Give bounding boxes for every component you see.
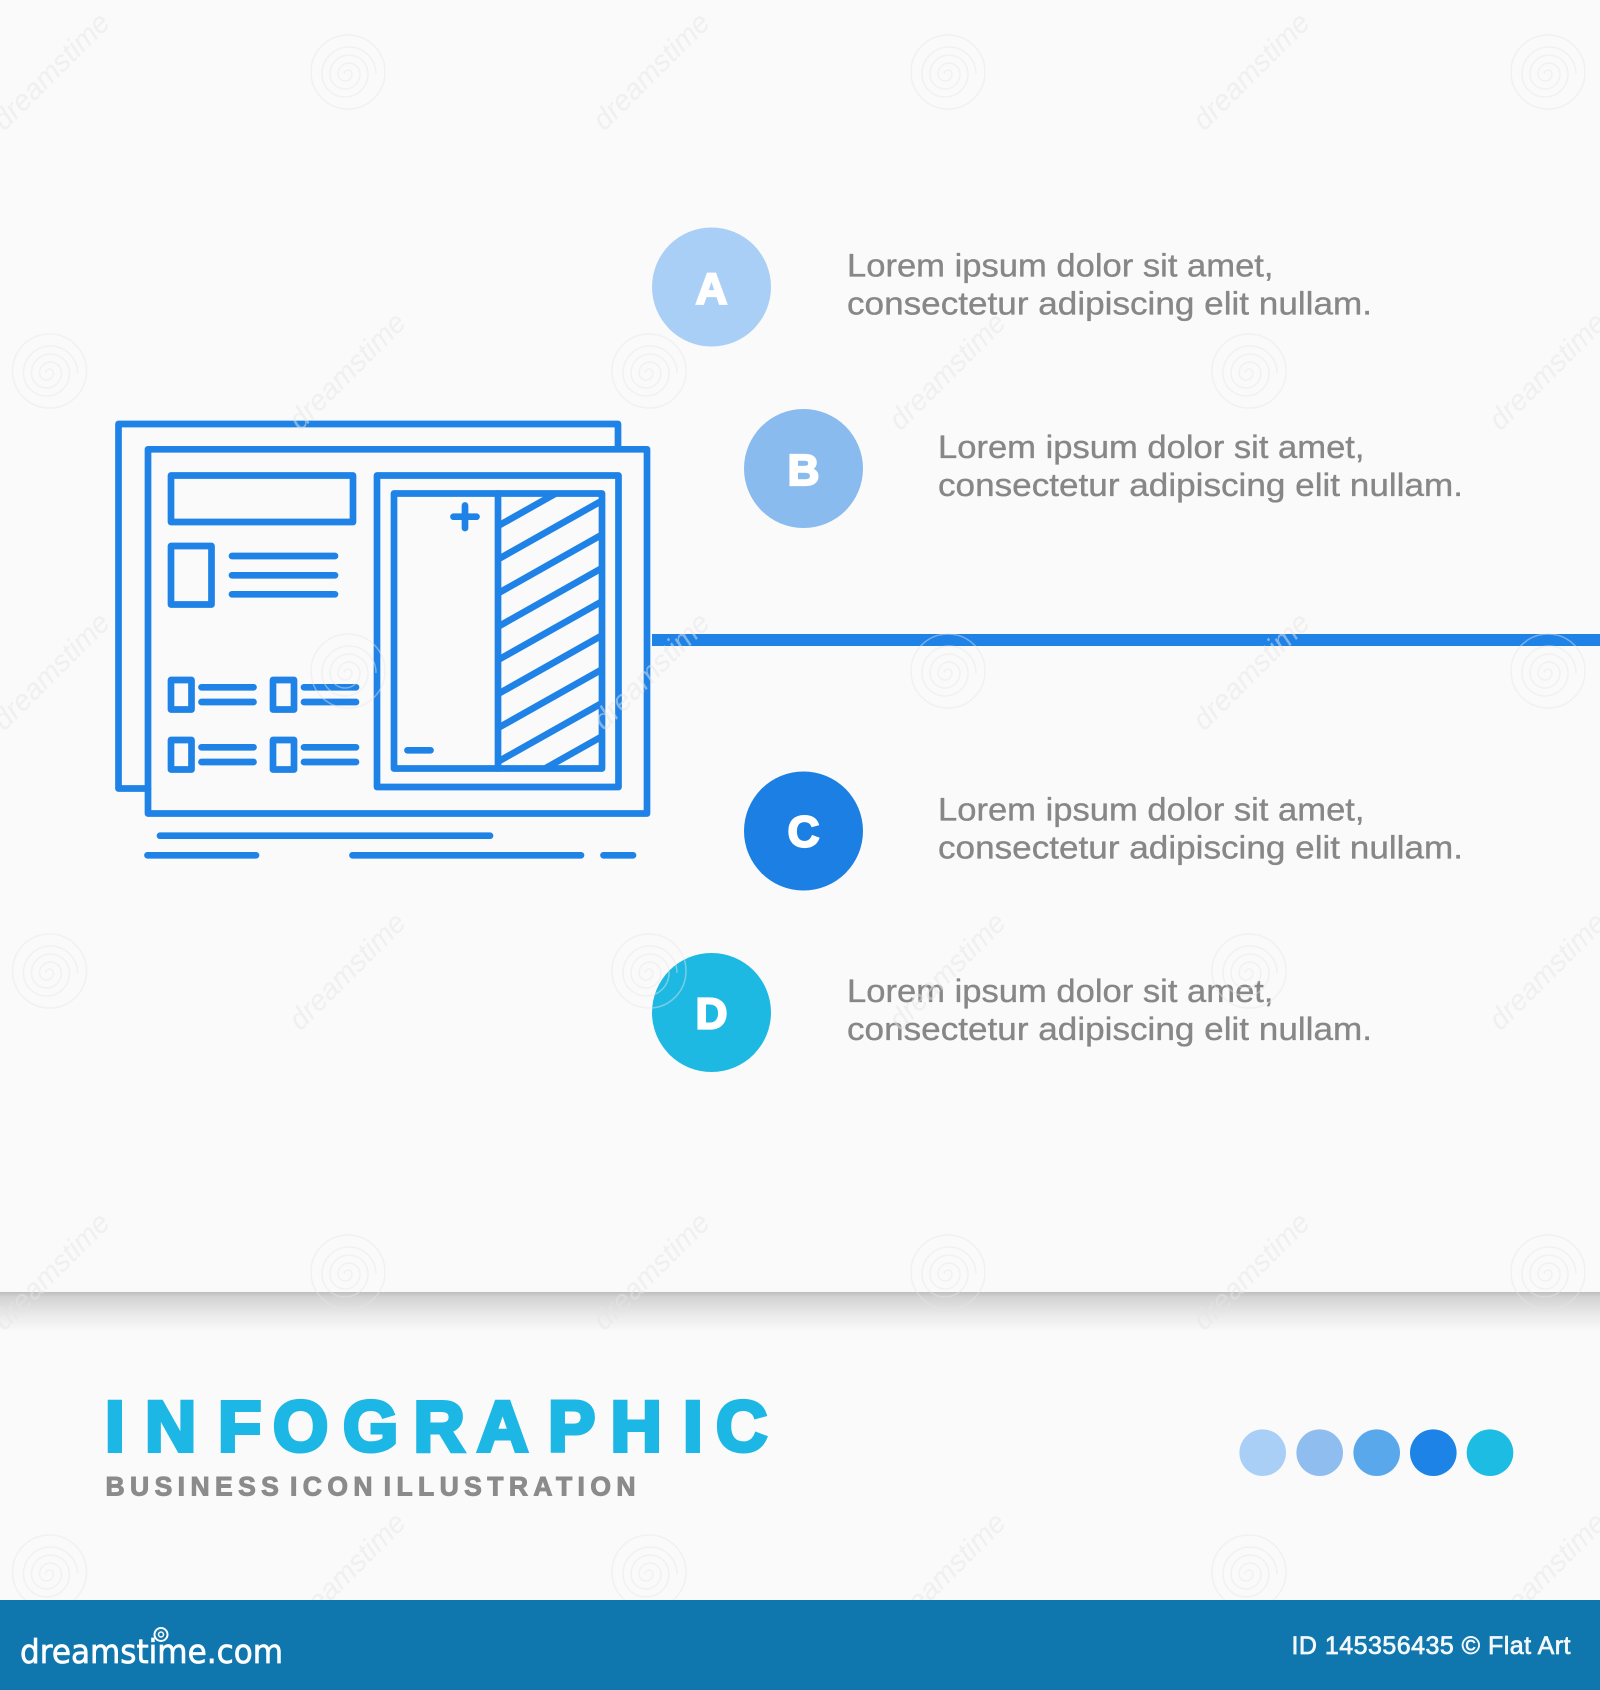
watermark layer: dreamstime	[1187, 7, 1317, 137]
item D: D	[696, 990, 727, 1038]
watermark layer: dreamstime	[587, 607, 717, 737]
colour dots	[1239, 1429, 1513, 1476]
item B	[744, 409, 1463, 528]
watermark layer: dreamstime	[283, 1507, 413, 1637]
item C: Lorem ipsum dolor sit amet,	[938, 792, 1364, 828]
item C: C	[788, 808, 819, 856]
item A: A	[696, 264, 727, 314]
watermark layer: dreamstime	[283, 907, 413, 1037]
footer panel shadow	[0, 1292, 1600, 1332]
footer band	[0, 1600, 1600, 1690]
item A	[652, 228, 1372, 346]
watermark layer: dreamstime	[883, 307, 1013, 437]
watermark layer: dreamstime	[283, 307, 413, 437]
item B: consectetur adipiscing elit nullam.	[938, 467, 1463, 503]
watermark layer: dreamstime	[587, 7, 717, 137]
watermark layer: dreamstime	[587, 1207, 717, 1337]
footer logo: dreamstime.com	[20, 1632, 283, 1671]
icon: layout editor window	[118, 424, 647, 855]
item C: consectetur adipiscing elit nullam.	[938, 830, 1463, 866]
watermark layer: dreamstime	[883, 1507, 1013, 1637]
title: INFOGRAPHIC	[105, 1388, 767, 1467]
watermark layer: dreamstime	[883, 907, 1013, 1037]
watermark layer: dreamstime	[1187, 607, 1317, 737]
item A: consectetur adipiscing elit nullam.	[847, 286, 1372, 322]
item A: Lorem ipsum dolor sit amet,	[847, 248, 1274, 284]
item D	[652, 953, 1372, 1072]
subtitle: BUSINESS ICON ILLUSTRATION	[106, 1472, 636, 1502]
image id credit: ID 145356435 © Flat Art	[1292, 1632, 1571, 1660]
connector line	[652, 634, 1600, 646]
item D: Lorem ipsum dolor sit amet,	[847, 973, 1274, 1009]
item C	[744, 772, 1463, 890]
item D: consectetur adipiscing elit nullam.	[847, 1011, 1372, 1047]
item B: B	[788, 446, 819, 495]
watermark layer: dreamstime	[1187, 1207, 1317, 1337]
item B: Lorem ipsum dolor sit amet,	[938, 429, 1364, 465]
